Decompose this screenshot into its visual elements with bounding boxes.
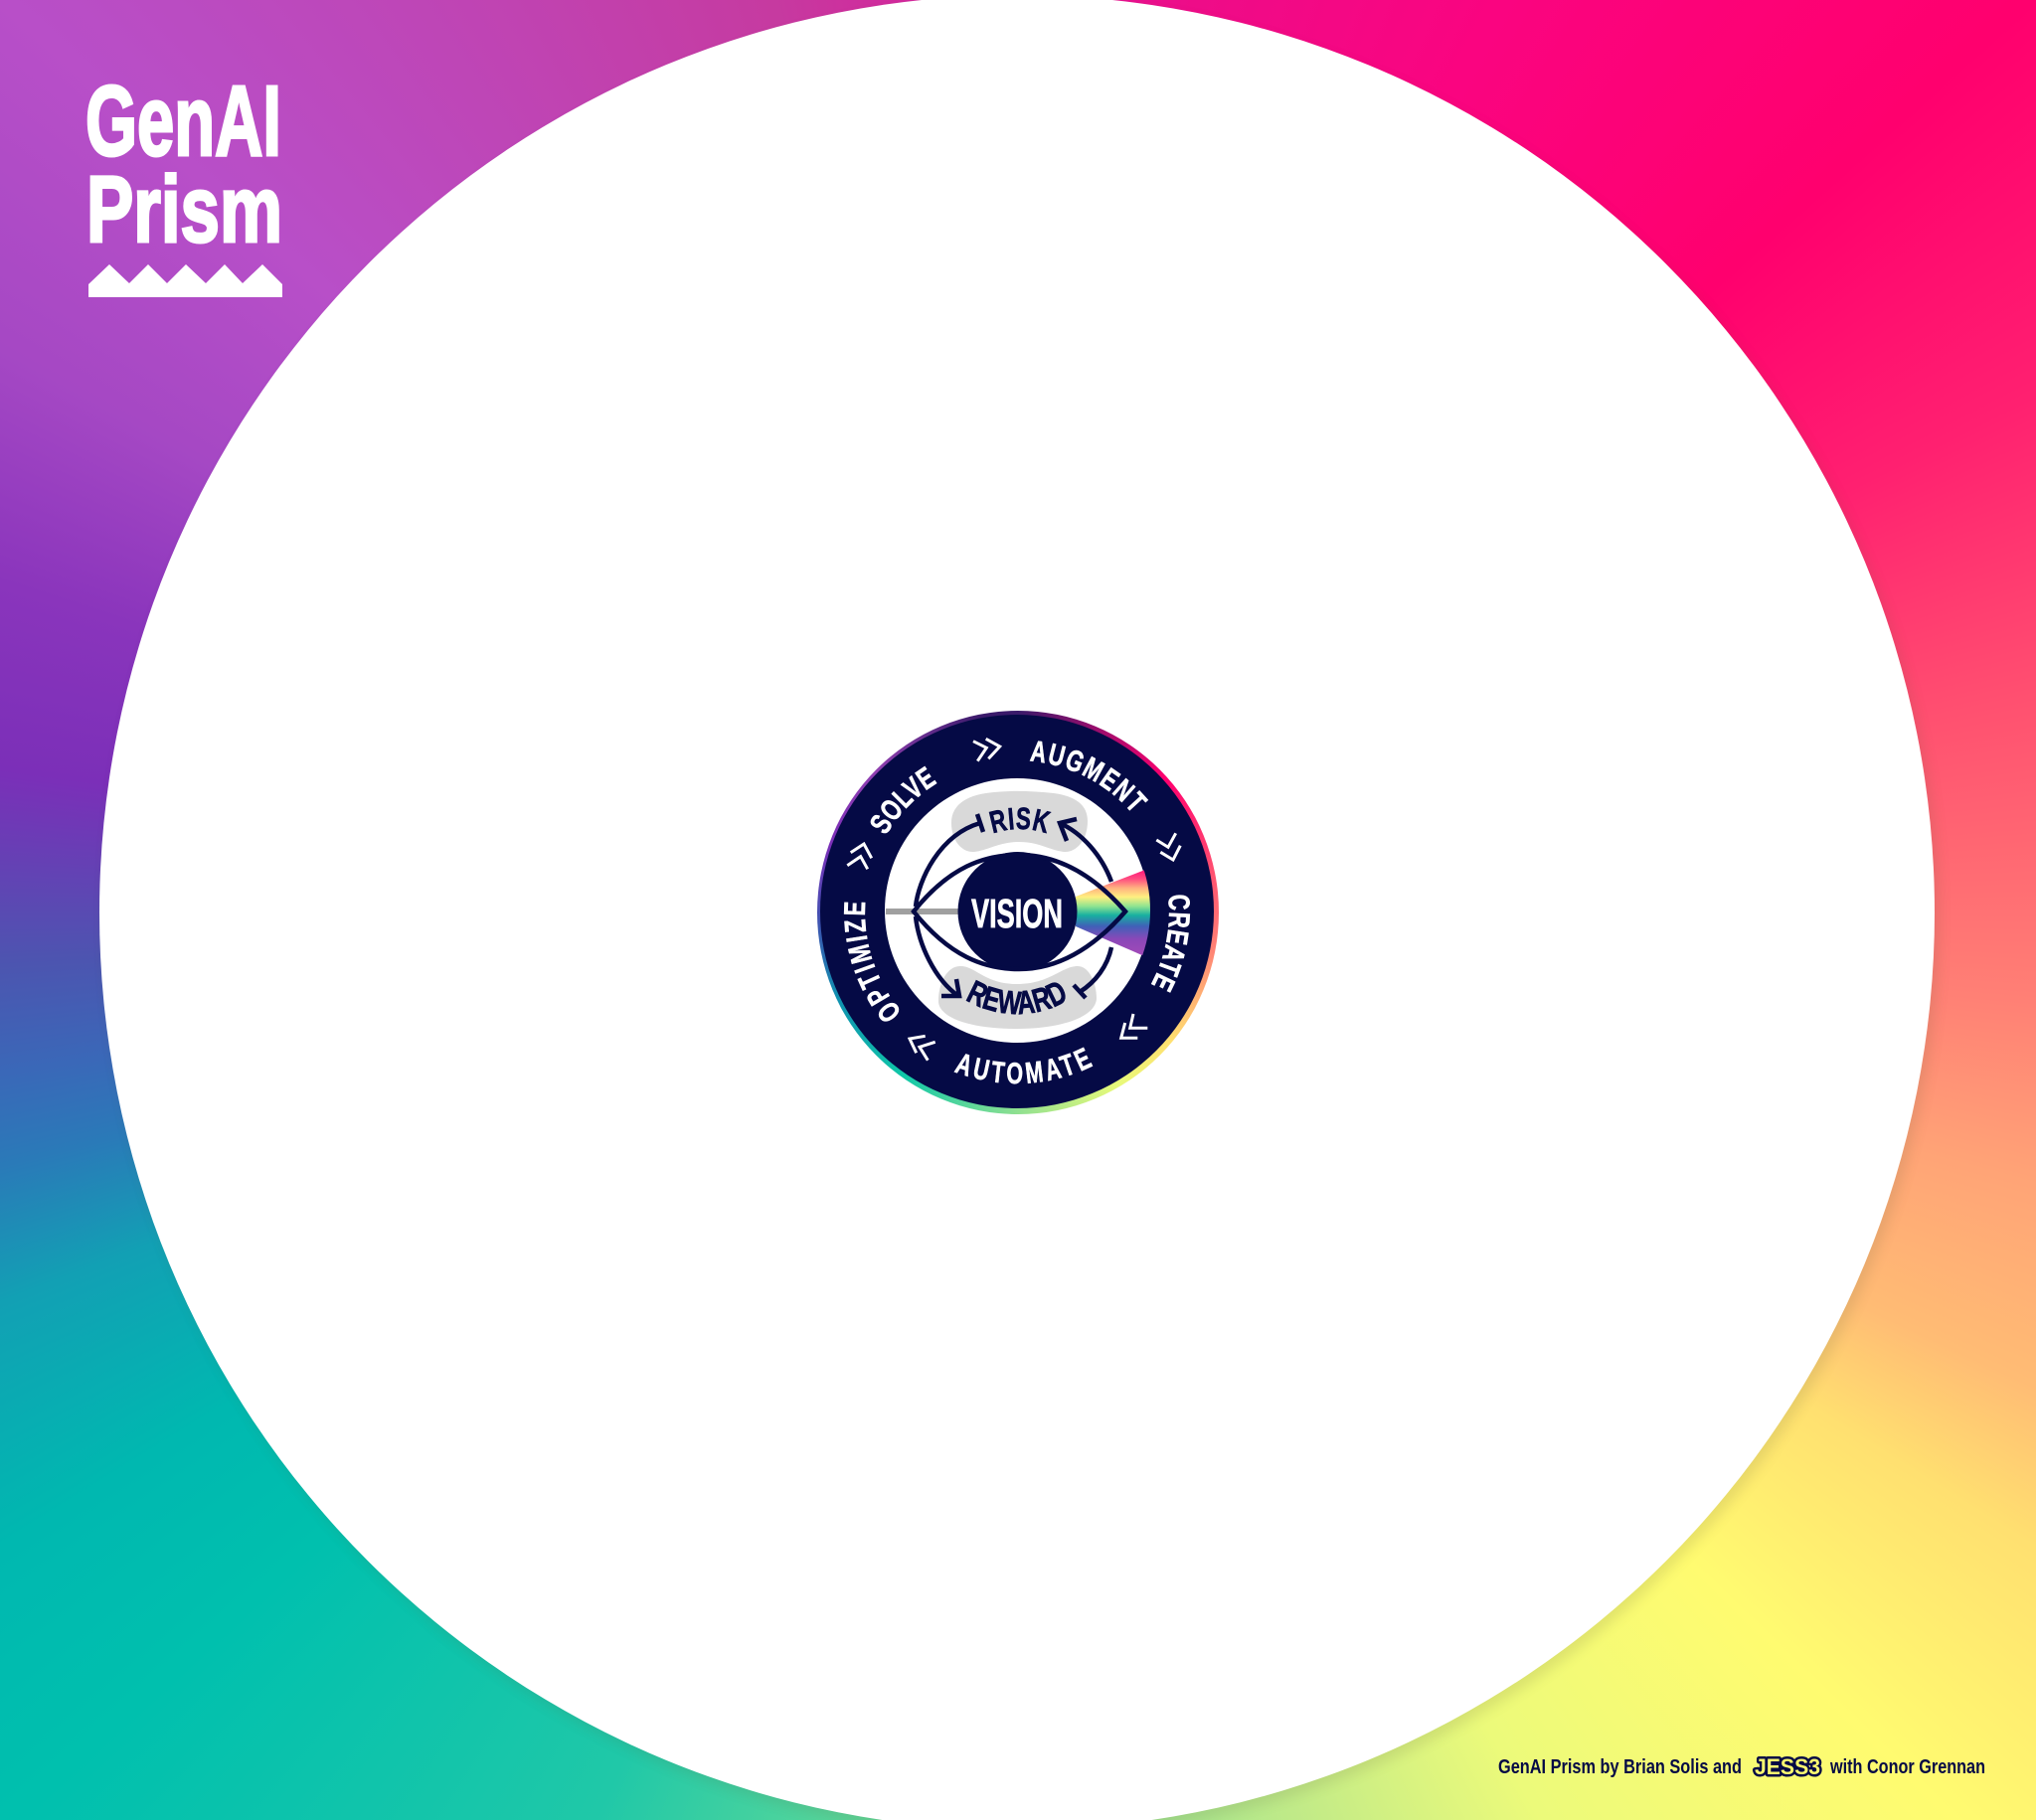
label OPTIMIZE: OPTIMIZE	[843, 903, 899, 1022]
chevrons right	[1156, 833, 1180, 860]
label AUTOMATE: AUTOMATE	[954, 1048, 1094, 1084]
badge rainbow rim	[817, 711, 1219, 1114]
chevrons top	[973, 739, 1000, 761]
label CREATE: CREATE	[1151, 895, 1191, 993]
arrow to risk with head	[1060, 819, 1111, 882]
footer credit	[1498, 1754, 1985, 1779]
logo word Prism: Prism	[86, 157, 282, 262]
eye outline	[914, 855, 1125, 969]
label SOLVE: SOLVE	[871, 765, 936, 833]
text RISK: RISK	[988, 807, 1052, 833]
prism spectrum beam	[1076, 871, 1150, 956]
label AUGMENT: AUGMENT	[1030, 741, 1149, 811]
logo: GenAI Prism	[85, 66, 282, 297]
reward grey blob	[938, 966, 1097, 1029]
ring labels	[843, 741, 1191, 1084]
inner white circle	[885, 778, 1149, 1043]
arrow to reward with head	[916, 916, 959, 996]
arrow to risk with T bar	[916, 814, 983, 907]
logo word GenAI: GenAI	[85, 66, 281, 177]
ring double chevrons	[847, 739, 1180, 1061]
credit left text: GenAI Prism by Brian Solis and	[1498, 1756, 1742, 1778]
input line	[886, 909, 961, 914]
text REWARD: REWARD	[966, 980, 1066, 1015]
JESS3 bubble logo: JESS3	[1755, 1754, 1820, 1779]
text VISION: VISION	[971, 891, 1063, 936]
navy badge disc	[820, 715, 1214, 1108]
credit right text: with Conor Grennan	[1829, 1756, 1985, 1778]
chevrons lower right	[1121, 1014, 1147, 1038]
pupil	[958, 852, 1078, 971]
chevrons left	[847, 844, 872, 869]
chevrons lower left	[910, 1036, 935, 1061]
arrow from reward with T bar	[1074, 947, 1111, 998]
risk and reward cycle arrows	[916, 814, 1111, 998]
risk grey blob	[951, 791, 1088, 852]
logo prism peaks mark	[88, 264, 282, 297]
